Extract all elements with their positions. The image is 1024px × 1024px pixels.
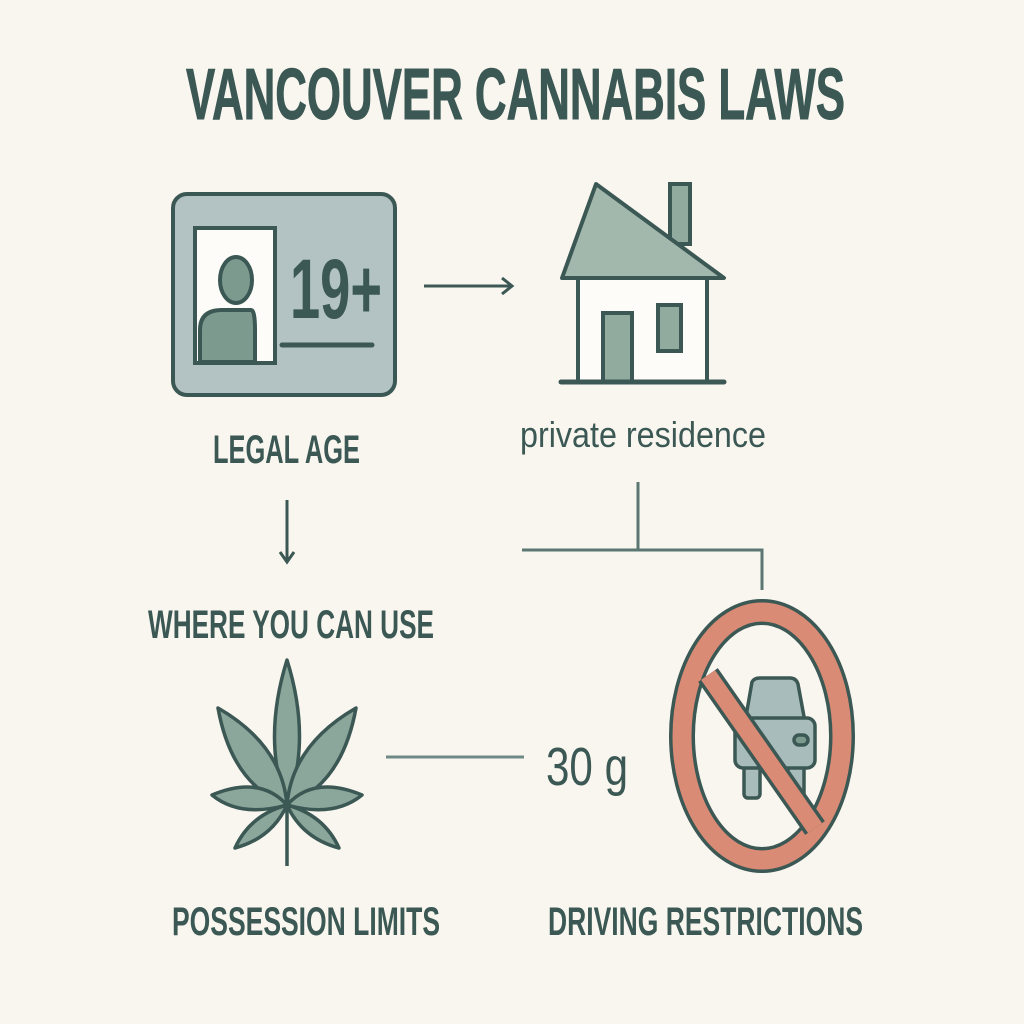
line to 30 g (386, 756, 524, 758)
text: 19+: 19+ (290, 242, 382, 336)
label: possession limits: POSSESSION LIMITS (172, 900, 440, 944)
arrow: right (424, 278, 512, 294)
label: where you can use: WHERE YOU CAN USE (148, 603, 434, 647)
label: driving restrictions: DRIVING RESTRICTIONS (548, 900, 863, 944)
icon: cannabis leaf (212, 660, 362, 866)
text: 30 g: 30 g (546, 737, 628, 797)
arrow: down (280, 500, 294, 562)
label: legal age: LEGAL AGE (213, 428, 360, 472)
label: private residence: private residence (520, 414, 766, 455)
car (735, 678, 815, 798)
icon: no driving (682, 612, 842, 860)
prohibition ring (682, 612, 842, 860)
connector (522, 482, 762, 590)
icon: house (561, 184, 724, 382)
icon: ID card (173, 194, 395, 395)
